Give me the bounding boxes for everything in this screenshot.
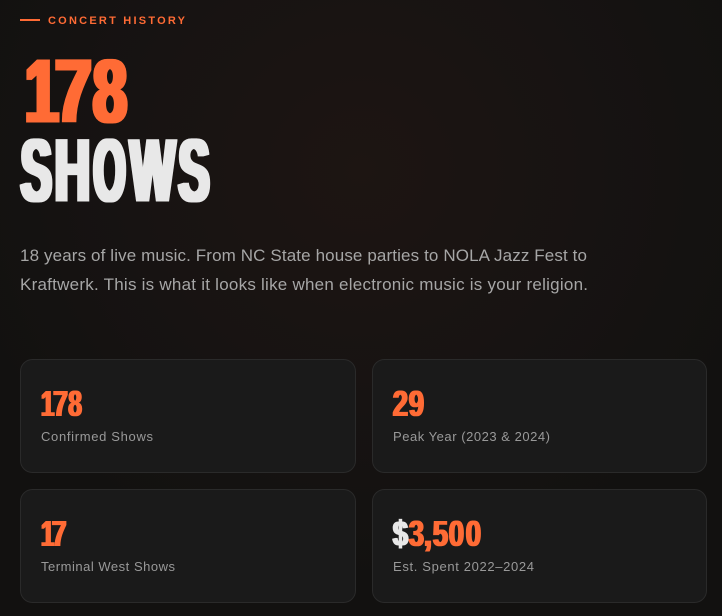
title: 8 [93,42,127,142]
panel: estimated spend: 5 [433,513,448,554]
title: H [55,120,90,220]
panel: terminal west shows: 7 [52,513,67,554]
panel: terminal west shows: 1 [41,513,54,554]
title: 7 [55,42,92,142]
panel: estimated spend: 0 [449,513,464,554]
panel: estimated spend: 0 [466,513,481,554]
panel: peak year [372,360,706,472]
panel: confirmed shows: 1 [41,383,54,424]
panel: confirmed shows: 8 [68,383,82,424]
eyebrow: concert history: CONCERT HISTORY [48,15,186,27]
title: S [178,120,210,220]
panel: peak year: 9 [409,383,424,424]
title: W [130,120,175,220]
panel: terminal west shows [20,490,356,602]
intro paragraph: Kraftwerk. This is what it looks like when electronic music is your religion. [20,275,588,294]
panel: estimated spend: $ [393,513,408,554]
panel: estimated spend [372,490,706,602]
panel: peak year: 2 [393,383,408,424]
title [21,42,209,220]
panel: peak year: Peak Year (2023 & 2024) [393,429,550,444]
intro paragraph [20,246,588,294]
panel: confirmed shows: Confirmed Shows [41,429,154,444]
panel: estimated spend: Est. Spent 2022–2024 [393,559,534,574]
panel: terminal west shows: Terminal West Shows [41,559,176,574]
panel: estimated spend: 3 [409,513,424,554]
panel: confirmed shows: 7 [53,383,68,424]
title: S [21,120,52,220]
title: 1 [25,42,59,142]
panel: estimated spend: , [424,513,432,554]
title: O [94,120,125,220]
panel: confirmed shows [20,360,356,472]
intro paragraph: 18 years of live music. From NC State house parties to NOLA Jazz Fest to [20,246,587,265]
